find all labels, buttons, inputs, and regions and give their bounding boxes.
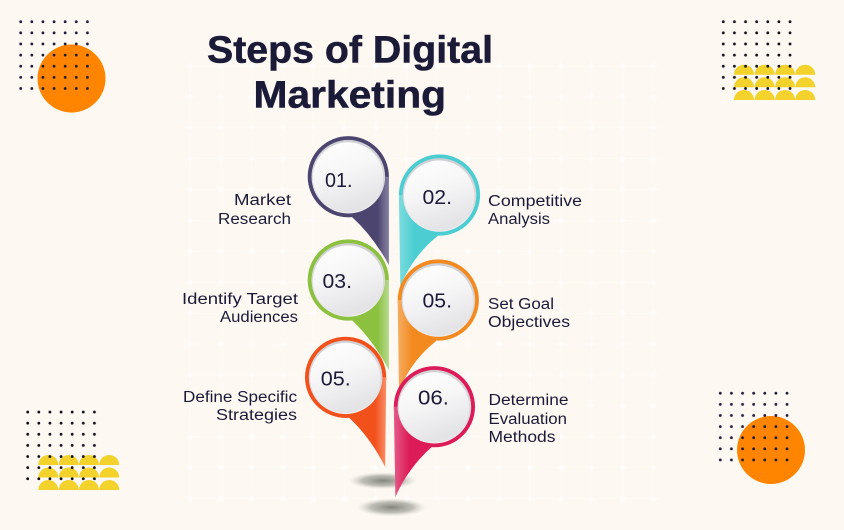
pin 01: 01. (325, 170, 352, 192)
label: determine evaluation methods (488, 392, 568, 446)
label: set goal objectives (488, 296, 570, 331)
title: Marketing (254, 75, 446, 117)
title (207, 30, 493, 117)
pin 03: 03. (322, 271, 352, 293)
pin 04 numbered 05: 05. (422, 290, 452, 312)
decoration: bottom-left dots and yellow semicircles (22, 406, 119, 490)
label: competitive analysis: Analysis (488, 211, 550, 228)
label: identify target audiences (182, 291, 299, 326)
decoration: top-right dots and yellow semicircles (718, 16, 815, 100)
label: set goal objectives: Objectives (488, 314, 570, 331)
pin shadows (349, 472, 427, 516)
decoration: bottom-right dots and orange circle (715, 388, 805, 484)
pin 05 (305, 337, 386, 467)
pin 06: 06. (418, 388, 449, 410)
label: market research: Research (218, 211, 291, 228)
pin 03 (308, 239, 389, 370)
label: identify target audiences: Identify Target (182, 291, 299, 308)
label: competitive analysis: Competitive (488, 193, 582, 210)
pin 02 (399, 154, 480, 286)
label: market research (218, 192, 292, 228)
pin 02: 02. (422, 187, 452, 209)
pin 04 numbered 05 (398, 259, 479, 391)
label: determine evaluation methods: Evaluation (488, 411, 567, 428)
title: Steps of Digital (207, 30, 493, 72)
pin 06 (394, 366, 475, 497)
label: market research: Market (234, 192, 292, 209)
pin 05: 05. (321, 368, 351, 390)
label: set goal objectives: Set Goal (488, 296, 554, 313)
label: identify target audiences: Audiences (220, 309, 298, 326)
label: competitive analysis (488, 193, 582, 228)
label: define specific strategies: Strategies (216, 407, 297, 424)
label: determine evaluation methods: Methods (488, 429, 556, 446)
pin 01 (308, 136, 389, 265)
label: define specific strategies (183, 389, 297, 424)
decoration: top-left dots and orange circle (15, 16, 106, 113)
label: determine evaluation methods: Determine (488, 392, 568, 409)
label: define specific strategies: Define Specific (183, 389, 297, 406)
